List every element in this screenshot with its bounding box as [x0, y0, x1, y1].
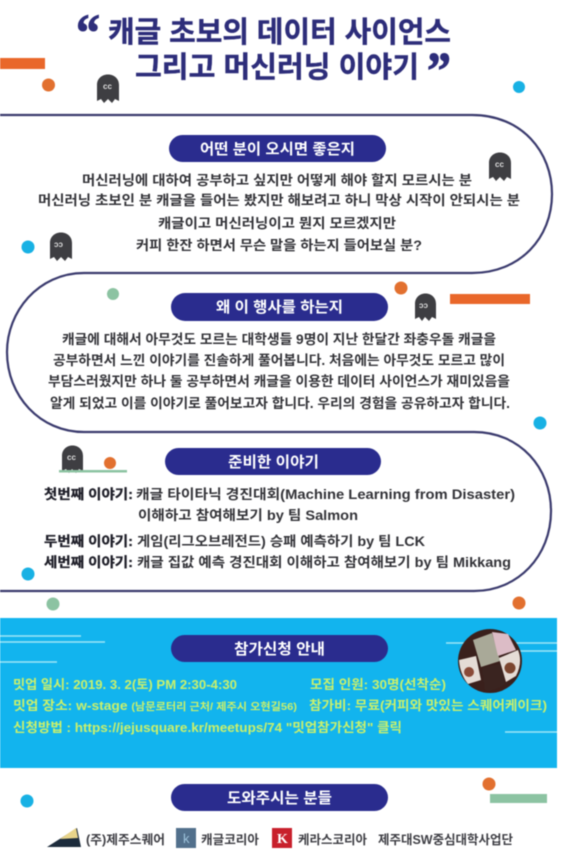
- heading pill: 어떤 분이 오시면 좋은지: 어떤 분이 오시면 좋은지: [200, 141, 355, 158]
- title: [76, 5, 451, 100]
- title: 캐글 초보의 데이터 사이언스: [108, 16, 451, 49]
- text block: meetup details: 신청방법 : https://jejusquare.kr/meetups/74 "밋업참가신청" 클릭: [13, 720, 402, 735]
- text block: story list: 세번째 이야기:: [44, 555, 133, 570]
- text block: event purpose: [48, 332, 510, 411]
- text block: story list: 캐글 타이타닉 경진대회(Machine Learning from Disaster): [136, 487, 515, 502]
- logo: Kaggle Korea: k: [183, 831, 190, 846]
- decoration: orange dot: [512, 596, 526, 610]
- text block: story list: 캐글 집값 예측 경진대회 이해하고 참여해보기 by 팀 Mikkang: [137, 555, 511, 570]
- logo: Keras Korea: [272, 828, 367, 848]
- decoration: cyan dot: [513, 81, 525, 93]
- logo: Kaggle Korea: 캐글코리아: [201, 833, 259, 847]
- icon: ghost 5: [62, 446, 83, 473]
- title: 그리고 머신러닝 이야기: [135, 51, 419, 84]
- logo: Keras Korea: 케라스코리아: [298, 833, 367, 847]
- decoration: orange bar: [450, 294, 530, 304]
- text block: event purpose: 공부하면서 느낀 이야기를 진솔하게 풀어봅니다. 처음에는 아무것도 모르고 많이: [53, 353, 505, 368]
- photo: square cake: [458, 629, 522, 693]
- text block: story list: [44, 487, 515, 570]
- decoration: green bar: [490, 794, 547, 803]
- icon: ghost 1: [97, 74, 119, 103]
- text block: meetup details: 밋업 일시: 2019. 3. 2(토) PM 2:30-4:30: [13, 677, 237, 692]
- text block: meetup details: [13, 677, 547, 735]
- text: Jeju University SW: 제주대SW중심대학사업단: [378, 832, 513, 847]
- heading pill: 어떤 분이 오시면 좋은지: [169, 135, 386, 162]
- decoration: green line: [59, 470, 127, 472]
- panel: sponsors: [20, 778, 547, 848]
- decoration: orange dot: [394, 282, 408, 294]
- text block: audience description: [38, 173, 520, 253]
- decoration: orange dot: [104, 457, 116, 469]
- text block: audience description: 머신러닝에 대하여 공부하고 싶지만 어떻게 해야 할지 모르시는 분: [82, 173, 472, 188]
- heading pill: 참가신청 안내: [171, 635, 388, 662]
- icon: ghost 2: [489, 152, 511, 181]
- icon: ghost 4: ɔɔ: [419, 301, 428, 310]
- text block: meetup details: 밋업 장소: w-stage (남문로터리 근처/ 제주시 오현길56): [13, 698, 297, 713]
- logo: Keras Korea: K: [277, 832, 288, 847]
- decoration: orange dot: [482, 778, 496, 790]
- panel: registration info: [0, 618, 557, 768]
- logo: Kaggle Korea: [176, 828, 259, 848]
- icon: ghost 5: cc: [67, 453, 76, 462]
- text block: audience description: 커피 한잔 하면서 무슨 말을 하는지 들어보실 분?: [136, 238, 422, 253]
- icon: ghost 4: [415, 294, 436, 321]
- text block: event purpose: 캐글에 대해서 아무것도 모르는 대학생들 9명이 지난 한달간 좌충우돌 캐글을: [62, 332, 496, 347]
- icon: ghost 2: cc: [495, 160, 504, 169]
- logo: Jeju Square: (주)제주스퀘어: [86, 832, 165, 847]
- heading pill: 참가신청 안내: 참가신청 안내: [234, 641, 325, 658]
- winding curve line: [0, 115, 552, 591]
- heading pill: 준비한 이야기: [165, 448, 381, 475]
- text block: story list: 이해하고 참여해보기 by 팀 Salmon: [138, 508, 358, 523]
- heading pill: 준비한 이야기: 준비한 이야기: [228, 454, 319, 471]
- decoration: cyan dot: [22, 568, 34, 580]
- decoration: green dot: [46, 598, 60, 610]
- text block: event purpose: 알게 되었고 이를 이야기로 풀어보고자 합니다. 우리의 경험을 공유하고자 합니다.: [50, 396, 510, 411]
- text block: meetup details: 모집 인원: 30명(선착순): [310, 677, 446, 692]
- icon: ghost 1: cc: [103, 82, 112, 91]
- decoration: orange dot: [42, 78, 55, 92]
- decoration: green dot: [107, 288, 119, 300]
- heading pill: 왜 이 행사를 하는지: [171, 293, 388, 321]
- title: ”: [427, 43, 451, 100]
- decoration: pale lines: [0, 636, 557, 732]
- title: “: [76, 5, 100, 62]
- text block: event purpose: 부담스러웠지만 하나 둘 공부하면서 캐글을 이용한 데이터 사이언스가 재미있음을: [48, 374, 510, 389]
- text block: story list: 두번째 이야기:: [44, 534, 133, 549]
- panel: who should come: [22, 135, 520, 261]
- panel: why this event: [48, 282, 546, 430]
- panel background: [0, 618, 557, 768]
- text block: story list: 게임(리그오브레전드) 승패 예측하기 by 팀 LCK: [137, 534, 425, 549]
- text block: audience description: 머신러닝 초보인 분 캐글을 들어는 봤지만 해보려고 하니 막상 시작이 안되시는 분: [38, 193, 520, 208]
- text block: meetup details: 참가비: 무료(커피와 맛있는 스퀘어케이크): [309, 698, 547, 713]
- panel: prepared stories: [22, 446, 515, 580]
- text block: audience description: 캐글이고 머신러닝이고 뭔지 모르겠지만: [158, 216, 397, 231]
- decoration: cyan dot: [534, 416, 546, 430]
- decoration: orange bar top left: [0, 58, 45, 69]
- logo: Jeju Square: [47, 828, 165, 847]
- heading pill: 왜 이 행사를 하는지: 왜 이 행사를 하는지: [216, 299, 343, 316]
- icon: ghost 3: ɔɔ: [54, 240, 63, 249]
- text block: story list: 첫번째 이야기:: [44, 487, 133, 502]
- decoration: cyan dot: [22, 240, 34, 254]
- heading pill: 도와주시는 분들: [171, 784, 388, 811]
- icon: ghost 3: [50, 232, 72, 261]
- heading pill: 도와주시는 분들: 도와주시는 분들: [227, 790, 332, 807]
- decoration: cyan dot: [20, 794, 34, 808]
